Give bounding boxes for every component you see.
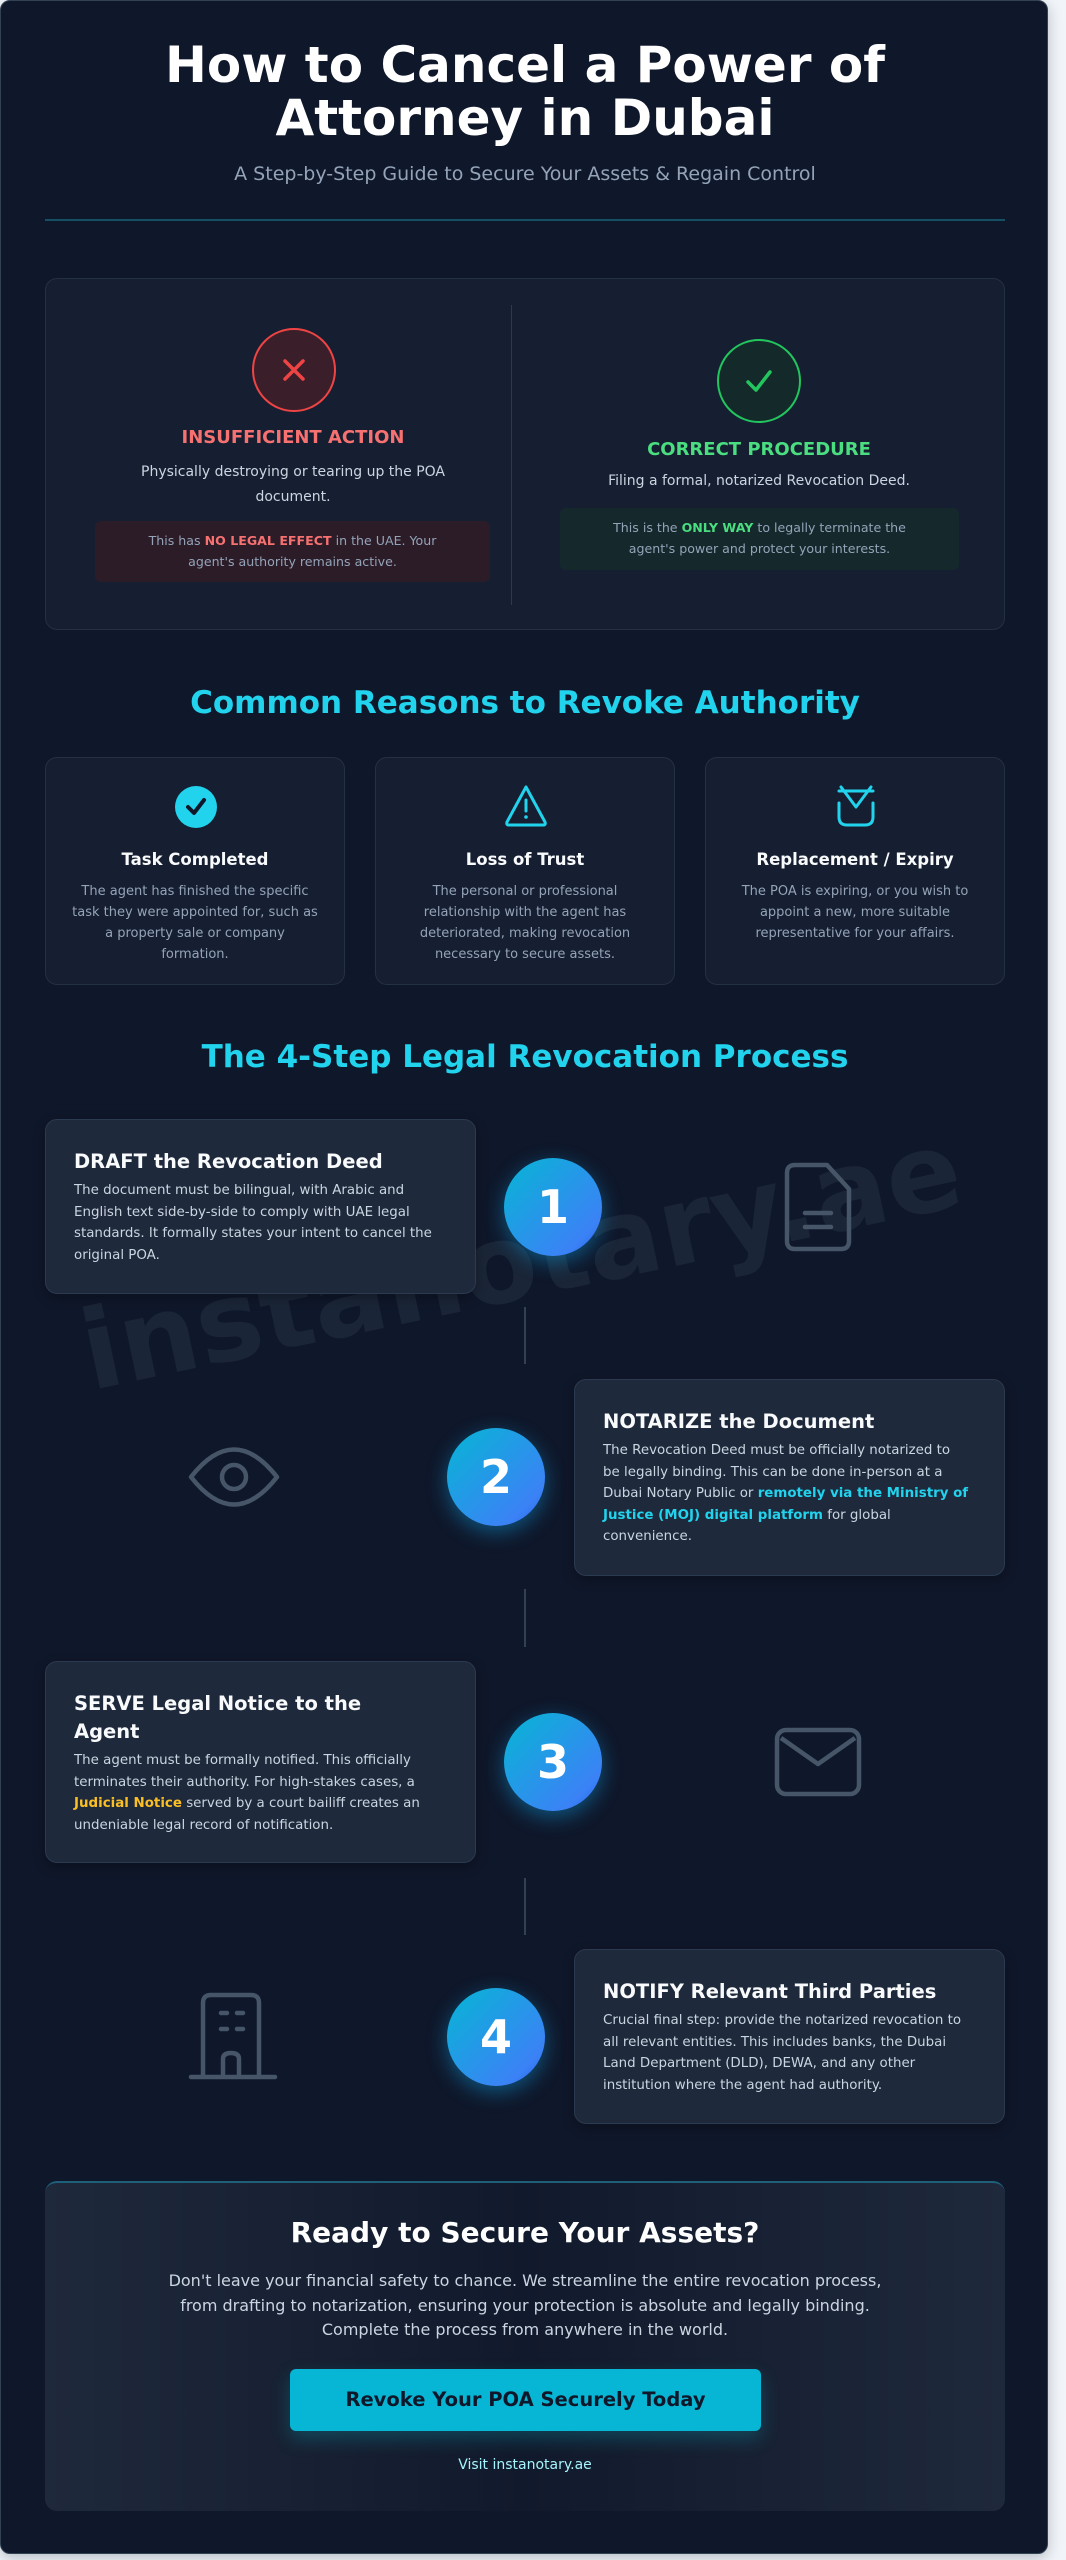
panel: comparison (45, 278, 1005, 630)
panel: loss of trust (375, 757, 675, 985)
subtitle: A Step-by-Step Guide to Secure Your Assets & Regain Control (234, 163, 816, 185)
insufficient action column (95, 328, 490, 582)
step 3 number (504, 1713, 602, 1811)
step 3 card (45, 1661, 476, 1863)
success box: agent's power and protect your interests. (629, 541, 890, 556)
icon: green check (717, 339, 801, 423)
step 3 card: SERVE Legal Notice to the (74, 1692, 361, 1715)
step 1 card: The document must be bilingual, with Arabic and English text side-by-side to comply with UAE legal standards. It formally states your intent to cancel the original POA. (74, 1183, 432, 1262)
step 4 card (574, 1949, 1005, 2124)
step 3 card: Agent (74, 1720, 139, 1743)
icon: warning (505, 785, 547, 826)
heading: INSUFFICIENT ACTION (182, 427, 404, 448)
warning box: agent's authority remains active. (188, 554, 397, 569)
panel: loss of trust: Loss of Trust (466, 850, 584, 869)
panel: replacement: The POA is expiring, or you wish to appoint a new, more suitable representative for your affairs. (742, 884, 968, 941)
step 3 number: 3 (537, 1735, 569, 1789)
step 2 number (447, 1428, 545, 1526)
icon: envelope (774, 1728, 862, 1796)
cta button: Revoke Your POA Securely Today (345, 2388, 706, 2411)
panel: task completed (45, 757, 345, 985)
panel: task completed: Task Completed (122, 850, 268, 869)
step 1 card: DRAFT the Revocation Deed (74, 1150, 383, 1173)
success box (560, 508, 959, 570)
heading: process: The 4-Step Legal Revocation Process (202, 1039, 848, 1075)
title: Attorney in Dubai (276, 89, 774, 147)
step 2 card: NOTARIZE the Document (603, 1410, 874, 1433)
cta heading: Ready to Secure Your Assets? (291, 2216, 759, 2249)
step 1 card (45, 1119, 476, 1294)
cta text: Don't leave your financial safety to chance. We streamline the entire revocation process, (169, 2271, 881, 2290)
title: How to Cancel a Power of (165, 36, 885, 94)
title (165, 36, 886, 147)
icon: building (188, 1992, 278, 2080)
warning box (95, 521, 490, 582)
icon: replace (838, 785, 874, 826)
warning box: This has NO LEGAL EFFECT in the UAE. Your (149, 533, 436, 548)
cta button (290, 2369, 761, 2431)
step 2 card (574, 1379, 1005, 1576)
heading: common reasons: Common Reasons to Revoke Authority (190, 685, 860, 721)
step 3 card: The agent must be formally notified. This officially terminates their authority. For high-stakes cases, a Judicial Notice served by a court bailiff creates an undeniable legal record of notification. (74, 1753, 420, 1832)
text: Filing a formal, notarized Revocation Deed. (608, 473, 910, 489)
step 1 number: 1 (537, 1180, 569, 1234)
cta text (169, 2271, 881, 2339)
icon: document (784, 1162, 852, 1252)
panel: call to action (45, 2181, 1005, 2511)
cta text: from drafting to notarization, ensuring your protection is absolute and legally binding. (180, 2296, 870, 2314)
cta text: Complete the process from anywhere in the world. (322, 2320, 728, 2339)
text: Physically destroying or tearing up the POA document. (141, 464, 445, 505)
step 4 number (447, 1988, 545, 2086)
watermark: instanotary.ae (70, 1104, 972, 1416)
heading: CORRECT PROCEDURE (647, 439, 871, 460)
icon: eye (188, 1447, 280, 1507)
step 4 card: NOTIFY Relevant Third Parties (603, 1980, 936, 2003)
panel: task completed: The agent has finished the specific task they were appointed for, such as a property sale or company formation. (72, 884, 318, 962)
success box: This is the ONLY WAY to legally terminate the (613, 520, 906, 535)
step 4 number: 4 (480, 2010, 512, 2064)
correct procedure column (560, 339, 959, 570)
panel: replacement (705, 757, 1005, 985)
panel: replacement: Replacement / Expiry (756, 850, 954, 869)
panel: loss of trust: The personal or professional relationship with the agent has deteriorated, making revocation necessary to secure assets. (420, 884, 630, 962)
icon: red x (252, 328, 336, 412)
step 2 number: 2 (480, 1450, 512, 1504)
step 1 number (504, 1158, 602, 1256)
cta link: Visit instanotary.ae (458, 2457, 592, 2473)
icon: check circle (175, 786, 217, 828)
step 4 card: Crucial final step: provide the notarized revocation to all relevant entities. This includes banks, the Dubai Land Department (DLD), DEWA, and any other institution where the agent had authority. (603, 2013, 961, 2092)
step 2 card: The Revocation Deed must be officially notarized to be legally binding. This can be done in-person at a Dubai Notary Public or remotely via the Ministry of Justice (MOJ) digital platform for global convenience. (603, 1443, 968, 1544)
